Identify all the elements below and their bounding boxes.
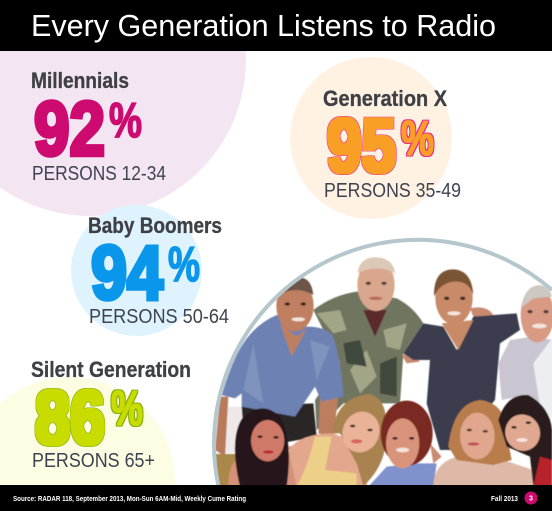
person: young man in blue shirt — [215, 277, 343, 457]
stat: generation X: % — [401, 112, 434, 166]
stat: millennials: 92 — [34, 87, 105, 172]
stat: baby boomers: 94 — [91, 231, 163, 316]
title bar — [0, 0, 552, 51]
stat: millennials: % — [109, 94, 142, 148]
source note: Source: RADAR 118, September 2013, Mon-Sun 6AM-Mid, Weekly Cume Rating — [13, 494, 246, 503]
stat: baby boomers — [88, 213, 229, 328]
date: Fall 2013 — [491, 494, 518, 503]
person: woman in dark hair, front left — [228, 408, 300, 487]
circle: baby boomers background — [71, 205, 202, 336]
footer bar — [0, 485, 552, 511]
stat: baby boomers: % — [168, 238, 200, 292]
page number badge: 3 — [529, 496, 533, 502]
person: older man in patterned shirt — [313, 257, 423, 430]
title bar: Every Generation Listens to Radio — [31, 8, 496, 43]
person: older woman in pink top — [433, 400, 533, 487]
stat: silent generation: 86 — [35, 376, 105, 461]
person: dark-haired woman at right — [498, 395, 552, 487]
photo ring — [214, 240, 552, 485]
photo: group of people of all generations in a circle — [213, 240, 552, 487]
circle: generation X background — [290, 57, 452, 219]
photo element: wall and sofa — [216, 406, 244, 485]
person: blonde woman in yellow top — [288, 394, 386, 487]
stat: millennials: PERSONS 12-34 — [32, 163, 166, 185]
stat: baby boomers: PERSONS 50-64 — [89, 306, 229, 328]
circle: millennials background — [0, 51, 246, 216]
stat: millennials — [31, 68, 166, 185]
stat: generation X: Generation X — [323, 86, 447, 111]
stat: millennials: Millennials — [31, 68, 129, 93]
person: young man in navy shirt — [402, 269, 520, 450]
stat: generation X: 95 — [327, 104, 396, 189]
stat: generation X — [323, 86, 461, 202]
person: older man at right — [498, 285, 552, 420]
person: red-haired woman in blue sweater — [368, 401, 442, 487]
stat: silent generation: PERSONS 65+ — [32, 450, 155, 472]
page number badge — [524, 492, 538, 504]
stat: baby boomers: Baby Boomers — [88, 213, 222, 238]
stat: silent generation — [31, 357, 191, 472]
circle: silent generation background — [0, 377, 175, 485]
stat: silent generation: Silent Generation — [31, 357, 191, 382]
stat: silent generation: % — [111, 382, 143, 436]
stat: generation X: PERSONS 35-49 — [324, 180, 461, 202]
